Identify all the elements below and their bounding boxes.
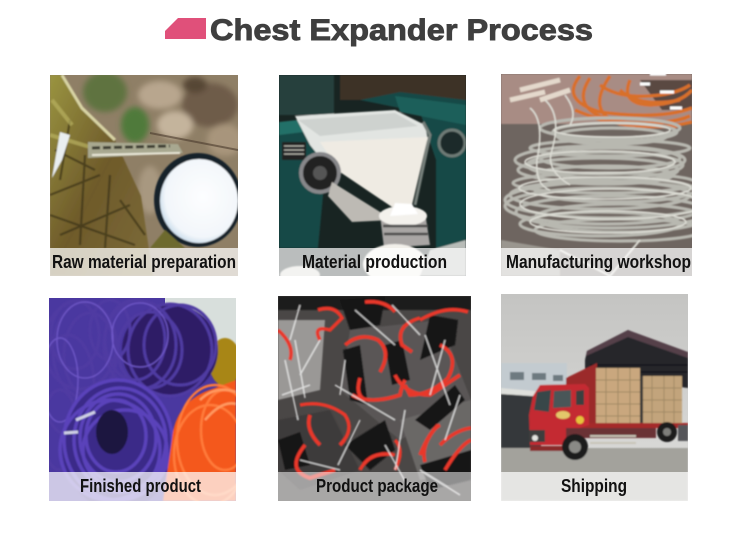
caption: Raw material preparation [52, 252, 236, 272]
panel: shipping [501, 294, 688, 501]
wheels and chassis [566, 428, 656, 438]
panel: material production [279, 75, 466, 284]
caption: Product package [316, 476, 438, 496]
caption [501, 472, 688, 501]
caption [501, 248, 692, 276]
icon: pink chamfered tab [165, 18, 206, 39]
caption [279, 248, 466, 276]
panel: product package [278, 296, 471, 501]
caption [49, 472, 236, 501]
trailer and boxes [566, 363, 597, 425]
caption: Manufacturing workshop [506, 252, 691, 272]
canopy [585, 330, 688, 388]
panel: manufacturing workshop [501, 74, 692, 276]
caption: Shipping [561, 476, 627, 496]
panel: finished product [49, 298, 236, 501]
building [501, 363, 567, 448]
caption: Material production [302, 252, 447, 272]
heading: title with pink tab [165, 14, 593, 47]
caption: Finished product [80, 476, 201, 496]
truck cab [529, 384, 589, 445]
caption [50, 248, 238, 276]
title: Chest Expander Process [210, 14, 593, 47]
panel: raw material preparation [50, 72, 243, 276]
caption [278, 472, 471, 501]
